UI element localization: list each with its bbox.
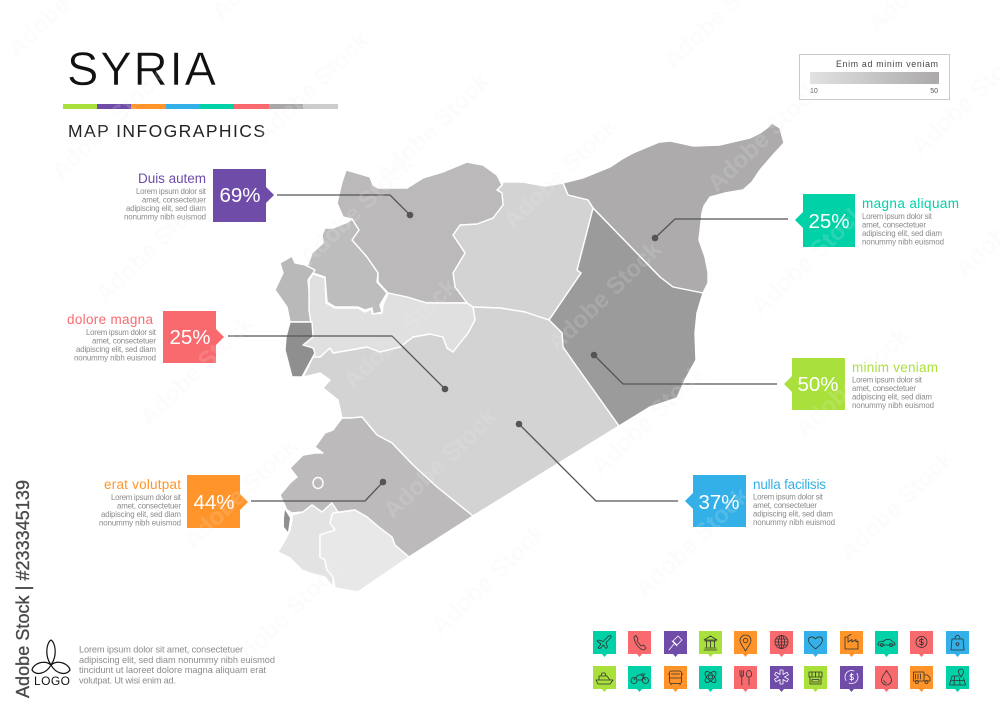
- callout: Duis autem: Lorem ipsum dolor sit: [136, 187, 207, 196]
- watermark: Adobe Stock: [702, 76, 827, 197]
- callout: minim veniam: 50%: [797, 373, 839, 396]
- legend: Enim ad minim veniam: [836, 59, 938, 69]
- callout: minim veniam: Lorem ipsum dolor sit: [852, 376, 923, 384]
- map of Syria: [275, 123, 784, 592]
- footer paragraph: tincidunt ut laoreet dolore magna aliquam erat: [79, 665, 266, 675]
- callout: minim veniam: nonummy nibh euismod: [852, 401, 934, 410]
- watermark: Adobe Stock: [790, 322, 915, 443]
- watermark: Adobe Stock: [498, 113, 623, 234]
- watermark: Adobe Stock: [338, 273, 463, 394]
- stock id vertical text: Adobe Stock | #233345139: [13, 480, 33, 698]
- callout: nulla facilisis: Lorem ipsum dolor sit: [753, 492, 824, 502]
- callout: nulla facilisis: nulla facilisis: [753, 477, 826, 492]
- region: Rif Dimashq: [280, 417, 473, 557]
- watermark: Adobe Stock: [178, 433, 303, 554]
- callout: Duis autem: [124, 169, 413, 222]
- region: Aleppo: [337, 162, 503, 303]
- subtitle: MAP INFOGRAPHICS: [68, 121, 265, 141]
- callout: dolore magna: Lorem ipsum dolor sit: [86, 328, 157, 337]
- region: Latakia: [275, 256, 315, 322]
- watermark: Adobe Stock: [834, 445, 959, 566]
- icon: truck: [910, 666, 933, 692]
- region: Deir ez-Zor: [549, 208, 703, 426]
- legend: 50: [930, 88, 938, 95]
- callout: nulla facilisis: nonummy nibh euismod: [753, 518, 835, 527]
- logo: LOGO: [34, 674, 70, 688]
- callout: dolore magna: [67, 311, 448, 392]
- callout: magna aliquam: amet, consectetuer: [862, 220, 926, 230]
- callout: minim veniam: amet, consectetuer: [852, 384, 916, 393]
- callout: erat volutpat: erat volutpat: [104, 477, 181, 492]
- callout: nulla facilisis: [516, 421, 835, 527]
- icon: bank: [699, 631, 722, 657]
- region: Damascus: [313, 478, 323, 488]
- legend: [800, 54, 950, 100]
- watermark: Adobe Stock: [134, 310, 259, 431]
- icon: pushpin: [664, 631, 687, 657]
- callout: Duis autem: Duis autem: [138, 171, 206, 186]
- callout: minim veniam: minim veniam: [852, 360, 938, 375]
- region: Al-Hasakah: [563, 123, 784, 293]
- icon: shop: [804, 666, 827, 692]
- region: Quneitra: [284, 510, 290, 532]
- callout: dolore magna: amet, consectetuer: [92, 336, 156, 346]
- callout: erat volutpat: adipiscing elit, sed diam: [101, 510, 181, 519]
- watermark: Adobe Stock: [90, 187, 215, 308]
- region: Daraa: [278, 503, 338, 587]
- callout: dolore magna: 25%: [169, 326, 211, 349]
- icon: factory: [840, 631, 863, 657]
- icon: water drop: [875, 666, 898, 692]
- callout: nulla facilisis: 37%: [698, 491, 740, 514]
- icon: ship: [593, 666, 616, 692]
- callout: magna aliquam: magna aliquam: [862, 196, 959, 211]
- icon: plane: [593, 631, 616, 657]
- icon: phone: [628, 631, 651, 657]
- icon: location: [734, 631, 757, 657]
- region: Hama: [303, 274, 475, 357]
- callout: nulla facilisis: adipiscing elit, sed diam: [753, 510, 833, 518]
- icon: refresh dollar: [840, 666, 863, 692]
- icon: motorcycle: [628, 666, 651, 692]
- watermark: Adobe Stock: [294, 150, 419, 271]
- callout: Duis autem: nonummy nibh euismod: [124, 212, 206, 222]
- icon: heart: [804, 631, 827, 657]
- icon: globe: [770, 631, 793, 657]
- callout: dolore magna: adipiscing elit, sed diam: [76, 345, 156, 354]
- callout: minim veniam: adipiscing elit, sed diam: [852, 392, 932, 402]
- callout: magna aliquam: adipiscing elit, sed diam: [862, 229, 942, 238]
- region: Idlib: [307, 219, 387, 314]
- watermark: Adobe Stock: [746, 199, 871, 320]
- footer paragraph: adipiscing elit, sed diam nonummy nibh euismod: [79, 655, 275, 665]
- callout: magna aliquam: [652, 194, 959, 247]
- watermark: Adobe Stock: [426, 519, 551, 640]
- callout: erat volutpat: nonummy nibh euismod: [99, 518, 181, 528]
- icon: bus: [664, 666, 687, 692]
- callout: dolore magna: dolore magna: [67, 312, 153, 327]
- watermark: Adobe Stock: [46, 64, 171, 185]
- watermark: Adobe Stock: [542, 236, 667, 357]
- callout: Duis autem: amet, consectetuer: [142, 196, 206, 204]
- icon: dollar coin: [910, 631, 933, 657]
- footer paragraph: Lorem ipsum dolor sit amet, consectetuer: [79, 644, 243, 654]
- footer paragraph: volutpat. Ut wisi enim ad.: [79, 676, 176, 686]
- watermark: Adobe Stock: [370, 68, 495, 189]
- callout: nulla facilisis: amet, consectetuer: [753, 501, 817, 510]
- watermark: Adobe Stock: [586, 359, 711, 480]
- icon: map pin: [946, 666, 969, 692]
- icon: atom: [699, 666, 722, 692]
- callout: minim veniam: [591, 352, 938, 410]
- callout: erat volutpat: [99, 475, 386, 528]
- watermark: Adobe Stock: [250, 27, 375, 148]
- watermark: Adobe Stock: [630, 482, 755, 603]
- icon: medical star: [770, 666, 793, 692]
- callout: erat volutpat: 44%: [193, 491, 235, 514]
- callout: Duis autem: 69%: [219, 184, 261, 207]
- callout: magna aliquam: 25%: [808, 210, 850, 233]
- icon: car: [875, 631, 898, 657]
- callout: dolore magna: nonummy nibh euismod: [74, 354, 156, 362]
- watermark: Adobe Stock: [222, 556, 347, 677]
- region: Homs south: [303, 307, 619, 516]
- callout: Duis autem: adipiscing elit, sed diam: [126, 204, 206, 213]
- title: SYRIA: [67, 42, 217, 95]
- icon: shopping bag: [946, 631, 969, 657]
- legend: 10: [810, 88, 818, 95]
- region: Tartus: [285, 322, 315, 377]
- callout: magna aliquam: Lorem ipsum dolor sit: [862, 212, 933, 221]
- watermark: Adobe Stock: [378, 403, 503, 524]
- callout: magna aliquam: nonummy nibh euismod: [862, 238, 944, 246]
- callout: erat volutpat: Lorem ipsum dolor sit: [111, 493, 182, 502]
- callout: erat volutpat: amet, consectetuer: [117, 502, 181, 510]
- region: As-Suwayda: [320, 510, 409, 592]
- icon: fork and spoon: [734, 666, 757, 692]
- region: Ar-Raqqah: [453, 182, 593, 320]
- colour bar: [63, 104, 338, 109]
- logo: [32, 640, 70, 688]
- icon grid: [593, 631, 969, 692]
- footer paragraph: [79, 644, 275, 686]
